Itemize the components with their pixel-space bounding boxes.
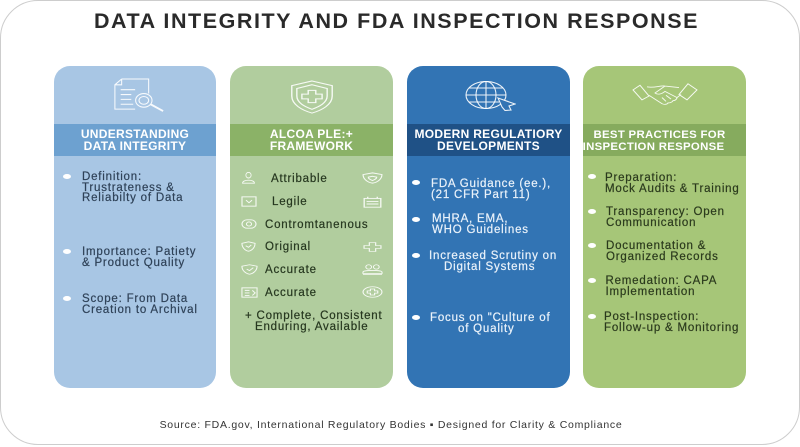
- panel: understanding data integrity: Reliabilty of Data: [82, 192, 183, 204]
- section heading: BEST PRACTICES FOR: [594, 129, 725, 141]
- item: attribable: [242, 172, 382, 185]
- note: complete consistent: + Complete, Consistent: [245, 310, 382, 322]
- section heading: UNDERSTANDING: [81, 127, 189, 141]
- panel: modern regulatory developments: Increased Scrutiny on: [429, 250, 557, 262]
- bullet: preparation: [588, 172, 740, 195]
- icon: handshake: [632, 83, 698, 105]
- bullet: transparency: [588, 206, 725, 229]
- panel: best practices: Implementation: [606, 286, 695, 298]
- panel: best practices: Preparation:: [605, 172, 677, 184]
- panel: best practices: [583, 66, 746, 388]
- section heading: [583, 124, 746, 156]
- section heading: FRAMEWORK: [270, 139, 353, 153]
- item: contromtanenous: [242, 219, 368, 231]
- item: legile: [241, 196, 382, 208]
- icon: globe with cursor: [466, 81, 516, 111]
- panel: ALCOA framework: Accurate: [265, 287, 317, 299]
- section heading: [230, 124, 393, 156]
- panel: modern regulatory developments: FDA Guidance (ee.),: [431, 178, 551, 190]
- bullet: MHRA EMA WHO: [412, 213, 529, 236]
- bullet: importance: [63, 246, 196, 269]
- panel: ALCOA framework: Contromtanenous: [265, 219, 368, 231]
- panel: modern regulatory developments: Digital Systems: [444, 261, 535, 273]
- panel: understanding data integrity: Importance: Patiety: [82, 246, 196, 258]
- panel: best practices: Mock Audits & Training: [605, 183, 740, 195]
- source footer: Source: FDA.gov, International Regulatory Bodies ▪ Designed for Clarity & Compliance: [160, 419, 622, 431]
- bullet: definition: [63, 170, 183, 204]
- bullet: post-inspection: [588, 310, 739, 334]
- section heading: DATA INTEGRITY: [84, 139, 186, 153]
- panel: modern regulatory developments: (21 CFR Part 11): [431, 189, 530, 201]
- panel: best practices: Post-Inspection:: [604, 311, 699, 323]
- bullet: scope: [63, 293, 198, 316]
- section heading: ALCOA PLE:+: [270, 127, 353, 141]
- item: original: [241, 240, 382, 253]
- panel: understanding data integrity: Scope: From Data: [82, 293, 188, 305]
- panel: understanding data integrity: & Product Quality: [82, 257, 185, 269]
- section heading: MODERN REGULATIORY: [414, 127, 563, 141]
- panel: best practices: Transparency: Open: [606, 206, 725, 218]
- panel: modern regulatory developments: Focus on "Culture of: [430, 312, 550, 324]
- item: accurate second: [241, 286, 382, 299]
- panel: best practices: Remedation: CAPA: [606, 275, 717, 287]
- panel: ALCOA framework: [230, 66, 393, 388]
- panel: ALCOA framework: Legile: [272, 196, 308, 208]
- panel: modern regulatory developments: WHO Guidelines: [432, 224, 529, 236]
- section heading: DEVELOPMENTS: [437, 139, 540, 153]
- bullet: remedation: [588, 274, 717, 298]
- section heading: [54, 124, 216, 156]
- panel: best practices: Organized Records: [606, 251, 719, 263]
- panel: understanding data integrity: Definition:: [82, 171, 142, 183]
- panel: ALCOA framework: Original: [265, 241, 311, 253]
- panel: ALCOA framework: Attribable: [271, 173, 328, 185]
- icon: document with magnifier: [114, 78, 164, 112]
- bullet: FDA guidance: [412, 178, 551, 201]
- bullet: digital systems: [412, 250, 557, 273]
- panel: modern regulatory developments: MHRA, EMA,: [432, 213, 508, 225]
- note: complete consistent: [245, 310, 382, 333]
- panel: modern regulatory developments: [407, 66, 570, 388]
- section heading: INSPECTION RESPONSE: [583, 141, 724, 153]
- panel: understanding data integrity: Creation to Archival: [82, 304, 198, 316]
- panel: best practices: Follow-up & Monitoring: [604, 322, 739, 334]
- panel: ALCOA framework: Accurate: [265, 264, 317, 276]
- panel: modern regulatory developments: of Quality: [458, 323, 515, 335]
- title: DATA INTEGRITY AND FDA INSPECTION RESPONSE: [94, 9, 699, 33]
- icon: shield with cross: [291, 80, 333, 114]
- panel: understanding data integrity: Trustrateness &: [82, 182, 175, 194]
- bullet: documentation: [588, 240, 719, 263]
- panel: best practices: Documentation &: [606, 240, 706, 252]
- note: complete consistent: Enduring, Available: [255, 321, 368, 333]
- panel: best practices: Communication: [606, 217, 696, 229]
- panel: understanding data integrity: [54, 66, 216, 388]
- section heading: [407, 124, 570, 156]
- item: accurate: [241, 264, 383, 276]
- bullet: culture of quality: [412, 312, 550, 335]
